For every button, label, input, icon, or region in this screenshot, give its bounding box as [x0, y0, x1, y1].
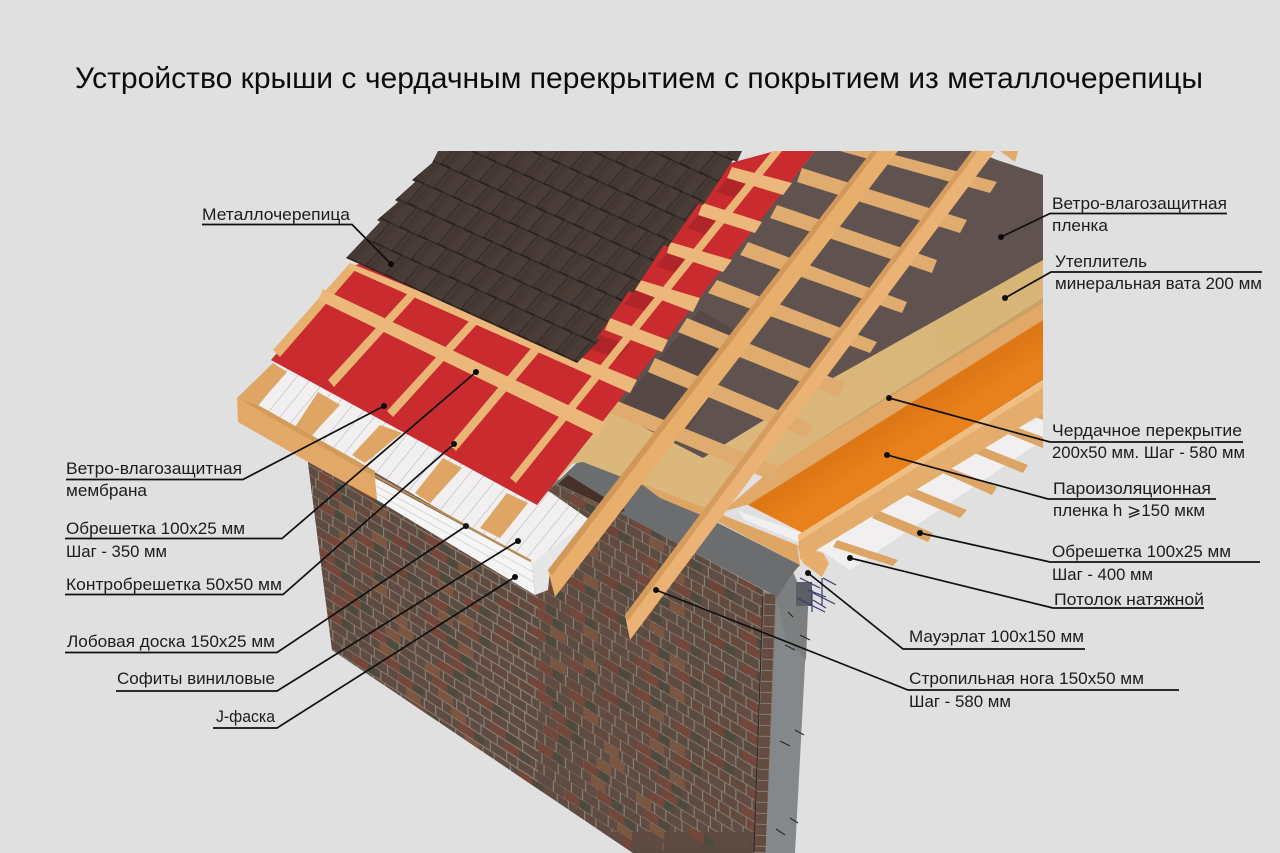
panel: concrete block end of wall — [766, 565, 810, 853]
panel: J-trim white fascia — [375, 476, 590, 595]
panel: vapour barrier film — [748, 320, 1043, 533]
label: Утеплитель — [1002, 252, 1262, 301]
label: Обрешетка шаг 400: Шаг - 400 мм — [1052, 565, 1153, 584]
label: Ветро-влагозащитная пленка: пленка — [1052, 216, 1109, 235]
label: Контробрешетка — [65, 441, 457, 594]
label: Ветро-влагозащитная мембрана: мембрана — [66, 481, 148, 500]
label: Мауэрлат: Мауэрлат 100х150 мм — [909, 627, 1084, 646]
panel: rebar — [796, 578, 836, 612]
title: Устройство крыши с чердачным перекрытием с покрытием из металлочерепицы — [75, 62, 1203, 95]
label: Обрешетка 100х25 мм шаг 350 — [65, 369, 479, 561]
panel: brick wall — [308, 462, 777, 853]
label: Лобовая доска — [65, 523, 469, 652]
label: Лобовая доска: Лобовая доска 150х25 мм — [67, 632, 275, 651]
panel: lower floor beam — [798, 381, 1043, 560]
label: Обрешетка 100х25 мм шаг 350: Шаг - 350 мм — [66, 542, 167, 561]
label: Обрешетка 100х25 мм шаг 350: Обрешетка 100х25 мм — [66, 519, 245, 538]
panel: ceiling white strip — [738, 416, 1043, 570]
panel: attic floor joist — [722, 298, 1043, 512]
label: Металлочерепица: Металлочерепица — [202, 205, 351, 224]
label: Софиты виниловые — [116, 538, 521, 691]
label: J-фаска: J-фаска — [216, 707, 276, 726]
label: Металлочерепица — [202, 205, 394, 267]
label: Пароизоляционная пленка: пленка h ⩾150 мкм — [1053, 501, 1205, 520]
panel: top brick row — [558, 475, 625, 513]
panel: wall top concrete band — [555, 457, 800, 597]
label: Стропильная нога: Стропильная нога 150х50 мм — [909, 669, 1144, 688]
panel: rafter tails — [237, 363, 528, 538]
panel: ceiling battens — [833, 410, 1043, 566]
label: Стропильная нога: Шаг - 580 мм — [909, 692, 1011, 711]
label: Ветро-влагозащитная мембрана — [66, 403, 387, 500]
label: Чердачное перекрытие: 200х50 мм. Шаг - 580 мм — [1052, 443, 1245, 462]
label: Ветро-влагозащитная мембрана: Ветро-влагозащитная — [66, 459, 242, 478]
panel: insulation mineral wool — [548, 258, 1043, 512]
label: Потолок натяжной — [847, 555, 1204, 609]
label: Утеплитель: Утеплитель — [1055, 252, 1147, 271]
label: Чердачное перекрытие: Чердачное перекрытие — [1052, 421, 1242, 440]
panel: metal roof tiles — [346, 151, 742, 363]
panel: red wind membrane — [271, 151, 815, 505]
label: Пароизоляционная пленка — [884, 452, 1216, 520]
panel: vinyl soffit — [258, 362, 590, 568]
panel: wall plate (mauerlat) — [640, 483, 829, 577]
label: Пароизоляционная пленка: Пароизоляционная — [1053, 479, 1211, 498]
label: Стропильная нога — [653, 587, 1179, 711]
panel: rafters — [548, 151, 995, 640]
panel: fascia board — [237, 398, 377, 500]
label: Контробрешетка: Контробрешетка 50х50 мм — [66, 575, 282, 594]
label: Утеплитель: минеральная вата 200 мм — [1055, 274, 1262, 293]
panel: roof battens on membrane — [318, 167, 792, 436]
panel: counter battens — [328, 151, 782, 483]
label: Обрешетка шаг 400: Обрешетка 100х25 мм — [1052, 542, 1231, 561]
label: Потолок натяжной: Потолок натяжной — [1054, 590, 1204, 609]
label: Чердачное перекрытие — [886, 395, 1245, 462]
panel: gable edge strip — [273, 263, 357, 357]
label: Обрешетка шаг 400 — [917, 530, 1260, 584]
label: Ветро-влагозащитная пленка — [998, 194, 1227, 240]
panel: roof battens over film — [590, 151, 1018, 482]
panel: wind and moisture film — [610, 151, 1043, 458]
label: Ветро-влагозащитная пленка: Ветро-влагозащитная — [1052, 194, 1227, 213]
label: Мауэрлат — [805, 570, 1085, 649]
label: Софиты виниловые: Софиты виниловые — [117, 669, 275, 688]
label: J-фаска — [213, 574, 518, 728]
